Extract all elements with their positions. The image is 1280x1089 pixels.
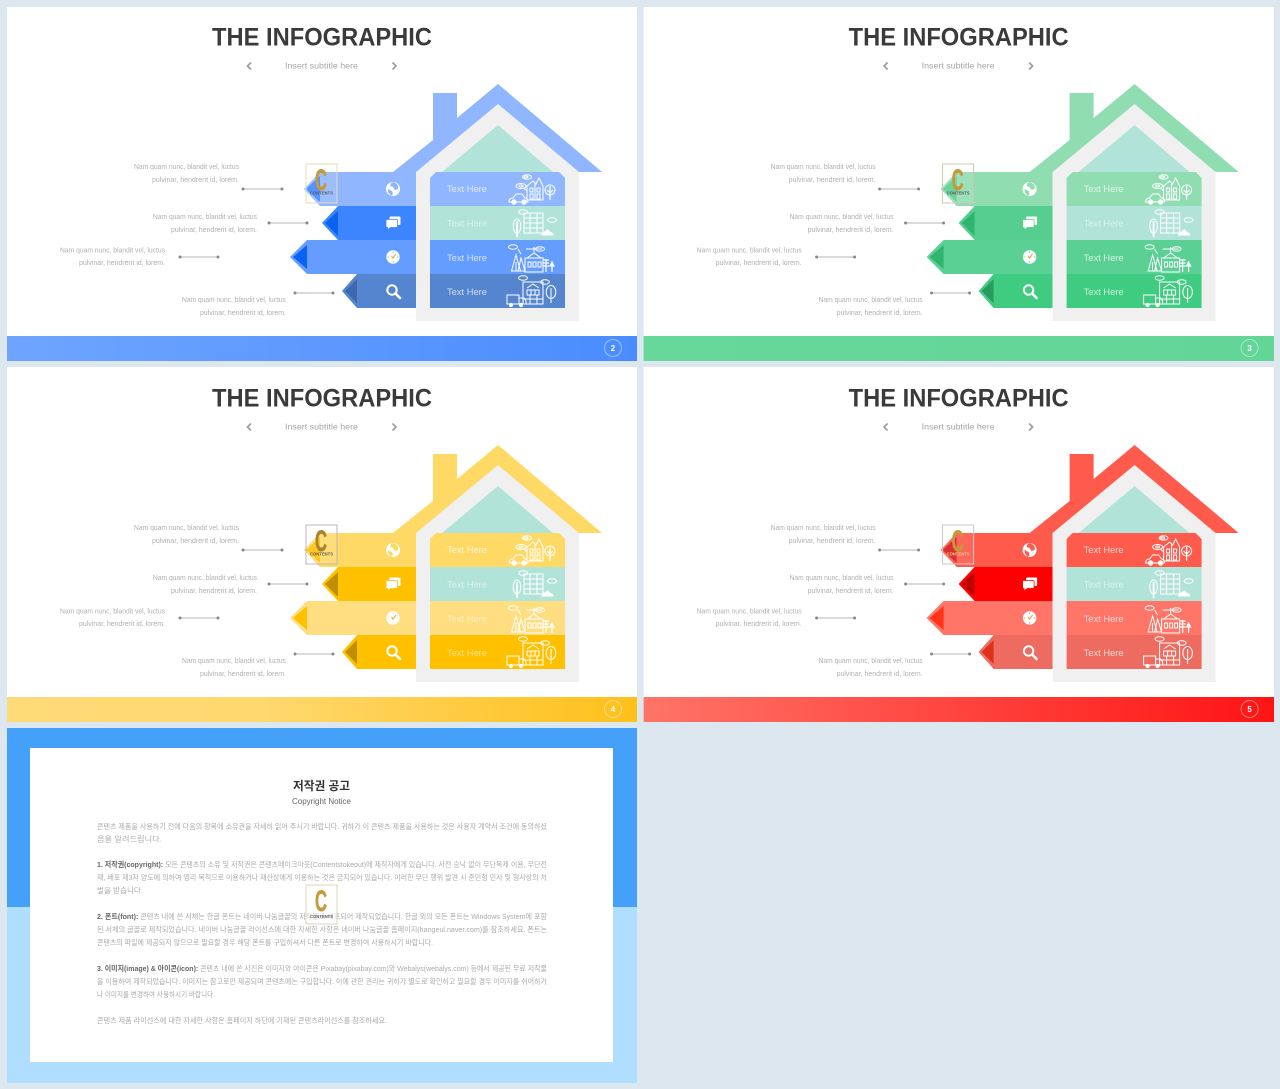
side notes: Nam quam nunc, blandit vel, luctus — [153, 212, 257, 221]
band 3 — [1067, 240, 1202, 274]
icon: clock — [1023, 250, 1036, 264]
paragraph 3: image and icon: 나 이미지를 변경하여 사용하시기 바랍니다. — [97, 989, 215, 999]
band 4: Text Here — [1084, 287, 1124, 297]
side notes: Nam quam nunc, blandit vel, luctus — [819, 295, 923, 304]
band 1: Text Here — [447, 545, 487, 555]
band 1 — [430, 533, 565, 567]
side notes: pulvinar, hendrerit id, lorem. — [808, 225, 894, 234]
side notes: pulvinar, hendrerit id, lorem. — [79, 258, 165, 267]
arrow 2 — [322, 567, 416, 601]
icon: search — [387, 646, 400, 659]
panel: red house infographic — [644, 367, 1274, 722]
page number — [1241, 700, 1258, 718]
connector lines — [815, 188, 971, 294]
paragraph 2: font: 된 서체의 글꼴로 제작되었습니다. 네이버 나눔글꼴 라이선스에 대한 자세한 사항은 네이버 나눔글꼴 홈페이지(hangeul.naver.com)를 참조하세요. 폰트는 — [97, 924, 547, 934]
watermark logo — [943, 525, 974, 564]
band 3: Text Here — [447, 253, 487, 263]
band 2 — [430, 567, 565, 601]
intro paragraph — [97, 821, 547, 844]
side notes: Nam quam nunc, blandit vel, luctus — [182, 656, 286, 665]
band 4: Text Here — [1084, 648, 1124, 658]
side notes: pulvinar, hendrerit id, lorem. — [716, 258, 802, 267]
watermark logo: CONTENTS — [947, 552, 970, 556]
title: THE INFOGRAPHIC — [212, 24, 432, 52]
subtitle with chevrons: Insert subtitle here — [922, 422, 995, 432]
title: THE INFOGRAPHIC — [849, 384, 1069, 412]
page number: 2 — [611, 344, 616, 353]
band 1 — [1067, 172, 1202, 206]
side notes: pulvinar, hendrerit id, lorem. — [152, 536, 239, 545]
watermark logo — [306, 525, 337, 564]
notice heading: 저작권 공고 — [293, 778, 350, 793]
band 3: Text Here — [1084, 253, 1124, 263]
side notes: Nam quam nunc, blandit vel, luctus — [771, 162, 876, 171]
intro paragraph: 음을 알려드립니다. — [97, 834, 162, 844]
side notes: Nam quam nunc, blandit vel, luctus — [771, 523, 876, 532]
band 4 — [1067, 635, 1202, 669]
watermark logo — [306, 885, 337, 924]
band 4 — [1067, 274, 1202, 308]
roof and chimney — [1030, 445, 1239, 533]
page number: 5 — [1247, 705, 1252, 714]
panel: copyright notice — [7, 728, 637, 1083]
icon: search — [1024, 285, 1037, 298]
intro paragraph: 콘텐츠 제품을 사용하기 전에 다음의 항목에 소유권을 자세히 읽어 주시기 바랍니다. 귀하가 이 콘텐츠 제품을 사용하는 것은 사용자 계약서 조건에 동의하셨 — [97, 821, 547, 831]
side notes — [697, 523, 923, 678]
icon: chat — [1023, 216, 1037, 230]
arrow 4 — [979, 635, 1053, 669]
watermark logo: C — [952, 164, 964, 197]
icon: chat — [386, 216, 400, 230]
band 4: Text Here — [447, 287, 487, 297]
roof and chimney — [393, 84, 602, 172]
page number: 3 — [1247, 344, 1252, 353]
icon: search — [387, 285, 400, 298]
arrow 3 — [927, 601, 1053, 635]
arrow 4 — [979, 274, 1053, 308]
icon: globe — [1023, 182, 1037, 196]
watermark logo — [943, 164, 974, 203]
connector lines — [178, 548, 334, 656]
band 3 — [1067, 601, 1202, 635]
arrow 1 — [941, 533, 1053, 567]
band 2 — [430, 206, 565, 240]
house body — [416, 104, 579, 321]
side notes: Nam quam nunc, blandit vel, luctus — [153, 573, 257, 582]
title: THE INFOGRAPHIC — [849, 24, 1069, 52]
band 1: Text Here — [447, 184, 487, 194]
band 1: Text Here — [1084, 184, 1124, 194]
paragraph 1: copyright: 재, 배포 제3자 양도에 의하여 영리 목적으로 이용하거나 재산상에게 이용하는 것은 금지되어 있습니다. 이러한 무단 행위 발견 시 준민형 민사 및 형사상의 처 — [97, 872, 547, 882]
paragraph 1: copyright: 벌을 받습니다. — [97, 885, 143, 895]
arrow 3 — [290, 240, 416, 274]
side notes: Nam quam nunc, blandit vel, luctus — [182, 295, 286, 304]
attic — [442, 486, 553, 533]
arrow 2 — [959, 206, 1053, 240]
side notes: Nam quam nunc, blandit vel, luctus — [60, 606, 165, 616]
side notes: pulvinar, hendrerit id, lorem. — [837, 308, 923, 317]
paragraph 2: font: 2. 폰트(font): 콘텐츠 내에 쓴 서체는 한글 폰트는 네이버 나눔글꼴의 저작물로 배포되어 제작되었습니다. 한글 외의 모든 폰트는 Windows System에 포함 — [97, 911, 547, 921]
side notes: Nam quam nunc, blandit vel, luctus — [819, 656, 923, 665]
band 1 — [1067, 533, 1202, 567]
band 4: Text Here — [447, 648, 487, 658]
band 3: Text Here — [447, 614, 487, 624]
subtitle with chevrons: Insert subtitle here — [922, 60, 995, 70]
side notes: pulvinar, hendrerit id, lorem. — [171, 225, 257, 234]
arrow 1 — [304, 533, 416, 567]
side notes: pulvinar, hendrerit id, lorem. — [789, 536, 876, 545]
icon: chat — [1023, 578, 1037, 591]
arrow 1 — [941, 172, 1053, 206]
band 4 — [430, 635, 565, 669]
attic — [1079, 486, 1190, 533]
side notes: pulvinar, hendrerit id, lorem. — [837, 669, 923, 678]
side notes: pulvinar, hendrerit id, lorem. — [79, 619, 165, 628]
band 2 — [1067, 206, 1202, 240]
icon: globe — [1023, 543, 1037, 557]
watermark logo: C — [952, 525, 964, 558]
arrow 1 — [304, 172, 416, 206]
paragraph 2: font: 콘텐츠의 파일에 제공되지 않으므로 필요할 경우 해당 폰트를 구입하셔서 다른 폰트로 변경하여 사용하시기 바랍니다. — [97, 937, 433, 947]
side notes: pulvinar, hendrerit id, lorem. — [716, 619, 802, 628]
title: THE INFOGRAPHIC — [212, 384, 432, 412]
band 2: Text Here — [447, 218, 487, 228]
side notes — [697, 162, 923, 317]
subtitle with chevrons — [884, 60, 1033, 70]
page number — [1241, 340, 1258, 356]
side notes: pulvinar, hendrerit id, lorem. — [200, 308, 286, 317]
side notes — [60, 523, 286, 678]
band 3: Text Here — [1084, 614, 1124, 624]
side notes: pulvinar, hendrerit id, lorem. — [171, 586, 257, 595]
paragraph 3: image and icon: 을 이용하여 제작되었습니다. 이미지는 참고로만 제공되며 콘텐츠에는 구입합니다. 이에 관한 권리는 귀하가 별도로 확인하고 필요할 경우 이미지를 쉬어하거 — [97, 976, 547, 986]
panel: yellow house infographic — [7, 367, 637, 722]
side notes: Nam quam nunc, blandit vel, luctus — [790, 212, 894, 221]
paragraph 1: copyright: 1. 저작권(copyright): 모든 콘텐츠의 소유 및 저작권은 콘텐츠메이크아웃(Contentstokeout)에 제작자에게 있습니다. 사전 승낙 없이 무단복제 이용, 무단전 — [97, 859, 547, 869]
side notes: Nam quam nunc, blandit vel, luctus — [697, 606, 802, 616]
house body — [416, 465, 579, 682]
icon: globe — [386, 182, 400, 196]
footer bar — [644, 697, 1274, 722]
subtitle with chevrons: Insert subtitle here — [285, 422, 358, 432]
paragraph 1: copyright — [97, 859, 547, 895]
watermark logo: CONTENTS — [310, 190, 333, 196]
subtitle with chevrons — [884, 422, 1033, 432]
panel: green house infographic — [644, 7, 1274, 361]
side notes: Nam quam nunc, blandit vel, luctus — [134, 162, 239, 171]
footer bar — [644, 336, 1274, 361]
band 1 — [430, 172, 565, 206]
band 1: Text Here — [1084, 545, 1124, 555]
paragraph 3: image and icon — [97, 963, 547, 999]
subtitle with chevrons — [248, 60, 396, 70]
side notes: Nam quam nunc, blandit vel, luctus — [134, 523, 239, 532]
subtitle with chevrons: Insert subtitle here — [285, 60, 358, 70]
connector lines — [178, 188, 334, 294]
footer bar — [7, 697, 637, 722]
side notes: Nam quam nunc, blandit vel, luctus — [790, 573, 894, 582]
icon: clock — [386, 611, 400, 625]
icon: chat — [386, 578, 400, 591]
arrow 3 — [927, 240, 1053, 274]
band 3 — [430, 240, 565, 274]
icon: clock — [1023, 611, 1036, 625]
side notes: Nam quam nunc, blandit vel, luctus — [60, 246, 165, 254]
house body — [1053, 465, 1216, 682]
band 2: Text Here — [1084, 580, 1124, 590]
watermark logo: CONTENTS — [310, 552, 333, 556]
band 4 — [430, 274, 565, 308]
band 2: Text Here — [1084, 218, 1124, 228]
footer bar — [7, 336, 637, 361]
roof and chimney — [1030, 84, 1239, 172]
arrow 4 — [342, 274, 416, 308]
side notes: pulvinar, hendrerit id, lorem. — [808, 586, 894, 595]
roof and chimney — [393, 445, 602, 533]
watermark logo: CONTENTS — [947, 190, 970, 196]
arrow 4 — [342, 635, 416, 669]
side notes: pulvinar, hendrerit id, lorem. — [200, 669, 286, 678]
icon: globe — [386, 543, 400, 557]
side notes: Nam quam nunc, blandit vel, luctus — [697, 246, 802, 254]
watermark logo: CONTENTS — [310, 914, 333, 919]
panel: blue house infographic — [7, 7, 637, 361]
side notes: pulvinar, hendrerit id, lorem. — [152, 175, 239, 184]
watermark logo: C — [315, 885, 327, 918]
subtitle with chevrons — [248, 422, 396, 432]
connector lines — [815, 548, 971, 656]
icon: clock — [386, 250, 400, 264]
closing line: 콘텐츠 제품 라이선스에 대한 자세한 사항은 홈페이지 하단에 기재된 콘텐츠라이선스를 참조하세요. — [97, 1015, 387, 1025]
side notes: pulvinar, hendrerit id, lorem. — [789, 175, 876, 184]
watermark logo: C — [315, 525, 327, 558]
page number — [604, 700, 622, 718]
arrow 3 — [290, 601, 416, 635]
watermark logo — [306, 164, 337, 203]
house body — [1053, 104, 1216, 321]
page number: 4 — [611, 705, 616, 714]
page number — [604, 340, 622, 356]
watermark logo: C — [315, 164, 327, 197]
icon: search — [1024, 646, 1037, 659]
band 3 — [430, 601, 565, 635]
arrow 2 — [959, 567, 1053, 601]
band 2 — [1067, 567, 1202, 601]
paragraph 2: font — [97, 911, 547, 947]
notice subheading: Copyright Notice — [292, 796, 351, 806]
attic — [1079, 125, 1190, 172]
side notes — [60, 162, 286, 317]
arrow 2 — [322, 206, 416, 240]
attic — [442, 125, 553, 172]
band 2: Text Here — [447, 580, 487, 590]
paragraph 3: image and icon: 3. 이미지(image) & 아이콘(icon): 콘텐츠 내에 쓴 사진은 이미지와 아이콘은 Pixabay(pixabay.com)와 Webalys(webalys.com) 등에서 제공된 무료 저작물 — [97, 963, 547, 973]
